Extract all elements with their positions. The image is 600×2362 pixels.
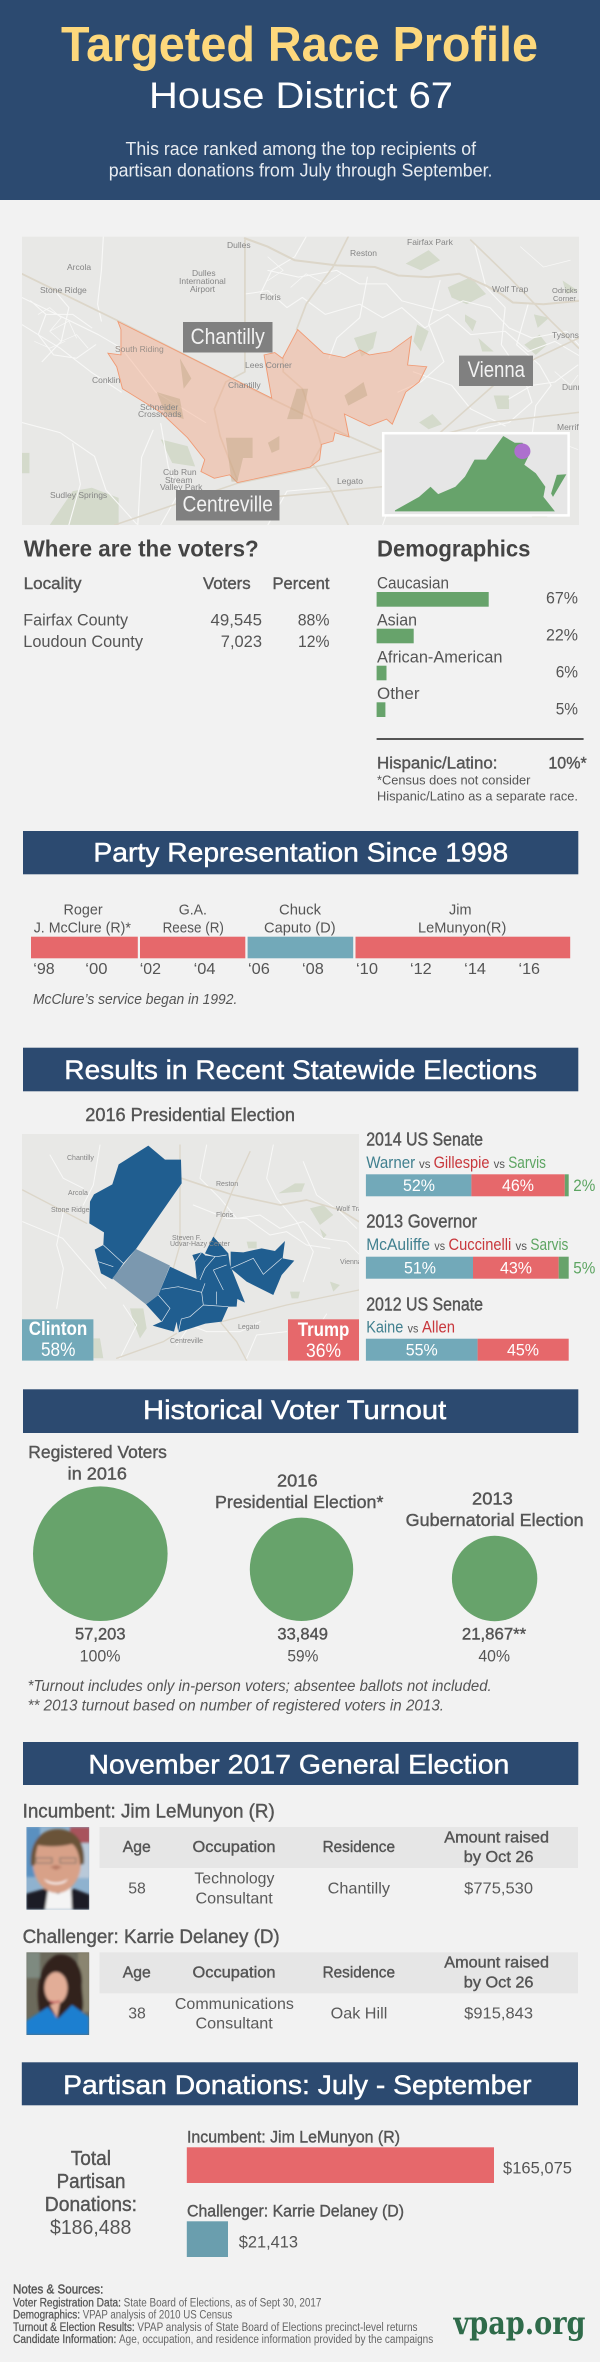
turnout footnotes: ** 2013 turnout based on number of registered voters in 2013. [28, 1698, 444, 1715]
heading bar: party representation [23, 831, 578, 874]
panel: partisan donations [22, 2062, 578, 2257]
heading bar: statewide elections: Results in Recent Statewide Elections [64, 1055, 537, 1085]
heading bar: statewide elections [23, 1048, 578, 1091]
locality table: Locality [24, 574, 82, 593]
result: 2014 US Senate: 52% [403, 1176, 435, 1195]
incumbent table: Occupation [192, 1839, 276, 1856]
callout: Clinton 58%: 58% [41, 1340, 75, 1361]
hispanic/latino stat: Hispanic/Latino: [377, 754, 498, 773]
challenger table: Consultant [196, 2016, 273, 2033]
demographic bar chart: 5% [556, 699, 578, 718]
result: 2012 US Senate [366, 1294, 569, 1361]
map place names: Legato [337, 476, 363, 486]
timeline year labels: ‘12 [410, 961, 432, 978]
total donations [45, 2148, 137, 2239]
result: 2013 Governor: vs [434, 1239, 445, 1253]
hispanic/latino stat: 10%* [548, 754, 587, 773]
notes and sources: VPAP analysis of State Board of Elections precinct-level returns [137, 2322, 418, 2334]
representative names: Reese (R) [163, 920, 224, 937]
locality table: 88% [298, 610, 330, 629]
heading bar: partisan donations [22, 2062, 578, 2105]
turnout footnotes [28, 1678, 492, 1715]
representative names: Caputo (D) [264, 920, 336, 937]
map place names: Airport [190, 284, 216, 294]
result: 2012 US Senate: 55% [406, 1341, 438, 1360]
map place names: Corner [553, 294, 576, 303]
result: 2012 US Senate: Kaine [366, 1317, 403, 1336]
result: 2014 US Senate: vs [419, 1157, 430, 1171]
circle: 2013 gubernatorial turnout: Gubernatorial Election [406, 1510, 584, 1530]
representative names: Jim [449, 902, 472, 919]
result: 2012 US Senate: 45% [507, 1341, 539, 1360]
incumbent table: Chantilly [328, 1880, 390, 1897]
notes and sources: VPAP analysis of 2010 US Census [83, 2310, 233, 2322]
result: 2012 US Senate: vs [408, 1321, 418, 1335]
donation bar: challenger [187, 2202, 404, 2257]
label: Chantilly: Chantilly [191, 324, 265, 349]
map place names: Legato [238, 1324, 260, 1331]
notes and sources [13, 2282, 433, 2346]
intro text: This race ranked among the top recipients of [126, 138, 477, 159]
notes and sources: State Board of Elections, as of Sept 30, 2017 [124, 2297, 321, 2309]
timeline year labels: ‘10 [356, 961, 378, 978]
result: 2013 Governor: 5% [573, 1258, 595, 1277]
circle: registered voters: in 2016 [68, 1464, 127, 1484]
circle: 2013 gubernatorial turnout: 40% [478, 1646, 510, 1665]
hispanic/latino stat: *Census does not consider [377, 772, 531, 787]
map place names: Dulles [192, 268, 216, 278]
map place names: Floris [260, 292, 281, 302]
map place names [51, 1155, 366, 1345]
map place names: Vienna [340, 1259, 362, 1266]
header banner [0, 0, 600, 200]
panel: general election [23, 1742, 578, 2035]
panel: statewide election results [22, 1048, 595, 1362]
result: 2013 Governor: vs [516, 1239, 527, 1253]
result: 2013 Governor: 43% [500, 1258, 532, 1277]
timeline bars [31, 937, 570, 958]
result: 2014 US Senate: Warner [366, 1153, 415, 1172]
turnout footnotes: *Turnout includes only in-person voters; absentee ballots not included. [28, 1678, 492, 1695]
map place names: Centreville [170, 1338, 203, 1345]
timeline year labels: ‘08 [302, 961, 324, 978]
callout: Clinton 58%: Clinton [29, 1319, 87, 1340]
map place names: Reston [350, 248, 377, 258]
result: 2013 Governor: Sarvis [530, 1235, 568, 1254]
heading bar: general election: November 2017 General Election [88, 1750, 509, 1780]
map place names: Floris [216, 1212, 234, 1219]
precinct shapes [89, 1146, 294, 1332]
circle: 2016 presidential turnout: 2016 [277, 1470, 318, 1490]
result: 2014 US Senate [366, 1129, 595, 1196]
heading bar: party representation: Party Representation Since 1998 [93, 838, 508, 868]
map place names: Lees Corner [245, 360, 292, 370]
map place names: Sudley Springs [50, 490, 107, 500]
result: 2014 US Senate: Sarvis [508, 1153, 546, 1172]
incumbent table: Age [123, 1839, 151, 1856]
result: 2013 Governor: Cuccinelli [448, 1235, 511, 1254]
heading bar: voter turnout [23, 1389, 578, 1433]
timeline year labels: ‘04 [194, 961, 216, 978]
donation bar: incumbent: $165,075 [503, 2158, 572, 2177]
map place names: Cub Run [163, 467, 197, 477]
timeline year labels: ‘06 [248, 961, 270, 978]
circle: registered voters: 100% [80, 1646, 120, 1665]
map place names: Crossroads [138, 409, 181, 419]
locality table: Loudoun County [23, 632, 143, 651]
notes and sources: Demographics: [13, 2310, 80, 2322]
heading: demographics: Demographics [377, 536, 530, 562]
hispanic/latino stat: Hispanic/Latino as a separate race. [377, 788, 578, 803]
locality table: 49,545 [210, 610, 262, 629]
map place names: Stream [165, 475, 192, 485]
map place names: Wolf Trap [492, 284, 528, 294]
representative names [34, 902, 506, 937]
district 67 shape [108, 321, 427, 483]
callout: Trump 36%: Trump [298, 1320, 349, 1341]
notes and sources: Notes & Sources: [13, 2282, 103, 2297]
circle: 2016 presidential turnout: Presidential Election* [215, 1492, 384, 1512]
challenger table: Amount raised [444, 1955, 549, 1972]
challenger table: 38 [128, 2006, 146, 2023]
incumbent table: Residence [323, 1839, 395, 1856]
map place names: Steven F. [172, 1235, 201, 1242]
timeline year labels: ‘02 [140, 961, 161, 978]
photo: Jim LeMunyon [26, 1827, 90, 1910]
demographic bar chart: African-American [377, 647, 502, 666]
map place names: Valley Park [160, 482, 203, 492]
heading bar: general election [23, 1742, 578, 1785]
representative names: G.A. [179, 902, 207, 919]
timeline year labels [33, 961, 540, 978]
heading bar: voter turnout: Historical Voter Turnout [143, 1395, 447, 1425]
result: 2013 Governor: 2013 Governor [366, 1212, 477, 1232]
result: 2013 Governor [366, 1212, 595, 1279]
map place names: South Riding [115, 344, 164, 354]
challenger table [100, 1952, 578, 2033]
notes and sources: Voter Registration Data: [13, 2297, 121, 2309]
demographic bar chart: Other [377, 684, 420, 703]
circle: registered voters: 57,203 [75, 1625, 126, 1644]
representative names: Roger [64, 902, 103, 919]
hispanic/latino stat [377, 754, 587, 803]
challenger table: $915,843 [464, 2006, 533, 2023]
map place names: Chantilly [67, 1155, 94, 1162]
circle: registered voters [28, 1442, 168, 1665]
heading: where are the voters: Where are the voters? [24, 536, 259, 562]
result: 2014 US Senate: 46% [502, 1176, 534, 1195]
result: 2013 Governor: McAuliffe [366, 1235, 430, 1254]
map place names: Dulles [227, 240, 251, 250]
map place names: Arcola [67, 262, 91, 272]
challenger table: Occupation [192, 1965, 276, 1982]
locality table: Percent [272, 574, 330, 593]
map place names: Fairfax Park [407, 237, 454, 247]
map place names: Wolf Trap [336, 1206, 366, 1213]
locality table: Fairfax County [23, 610, 128, 629]
total donations: Donations: [45, 2194, 137, 2216]
locality table: Voters [203, 574, 251, 593]
heading: challenger: Challenger: Karrie Delaney (D) [23, 1927, 280, 1948]
incumbent table: Technology [194, 1871, 274, 1888]
panel: party representation [23, 831, 578, 1008]
incumbent table: Amount raised [444, 1829, 549, 1846]
circle: registered voters: Registered Voters [28, 1442, 167, 1462]
notes and sources: Turnout & Election Results: [13, 2322, 135, 2334]
inset: Virginia locator map [383, 433, 569, 515]
result: 2014 US Senate: vs [494, 1157, 505, 1171]
circle: 2013 gubernatorial turnout [406, 1488, 584, 1665]
result: 2013 Governor: 51% [404, 1258, 436, 1277]
challenger table: by Oct 26 [464, 1974, 534, 1991]
result: 2014 US Senate: 2014 US Senate [366, 1129, 483, 1149]
circle: 2016 presidential turnout: 33,849 [277, 1625, 328, 1644]
heading: incumbent: Incumbent: Jim LeMunyon (R) [23, 1802, 275, 1823]
photo: Karrie Delaney [26, 1952, 90, 2035]
map place names: Chantilly [228, 380, 261, 390]
map place names: Stone Ridge [40, 285, 87, 295]
total donations: $186,488 [50, 2217, 131, 2239]
notes and sources: Candidate Information: [13, 2334, 116, 2346]
demographic bar chart: 6% [556, 662, 578, 681]
heading bar: partisan donations: Partisan Donations: July - September [63, 2070, 532, 2100]
intro text [109, 138, 492, 180]
map place names: Udvar-Hazy Center [170, 1241, 231, 1248]
timeline year labels: ‘14 [464, 961, 486, 978]
result: 2014 US Senate: Gillespie [434, 1153, 490, 1172]
map place names: Odricks [552, 286, 578, 295]
total donations: Partisan [57, 2171, 126, 2193]
map place names: Reston [216, 1181, 238, 1188]
map place names: Merrifield [557, 422, 592, 432]
callout: Trump 36%: 36% [306, 1341, 341, 1362]
timeline year labels: ‘00 [85, 961, 108, 978]
label: Vienna: Vienna [468, 357, 526, 382]
donation bar: challenger: $21,413 [239, 2232, 298, 2251]
donation bar: incumbent [187, 2128, 572, 2183]
2016 presidential map [22, 1134, 367, 1362]
map place names [40, 237, 592, 500]
map place names: Stone Ridge [51, 1207, 90, 1214]
intro text: partisan donations from July through September. [109, 160, 492, 180]
district map [22, 237, 600, 525]
notes and sources: Age, occupation, and residence information provided by the campaigns [119, 2334, 433, 2346]
result: 2012 US Senate: 2012 US Senate [366, 1294, 483, 1314]
timeline year labels: ‘16 [518, 961, 540, 978]
label: Centreville: Centreville [182, 491, 273, 516]
circle: 2013 gubernatorial turnout: 21,867** [462, 1625, 527, 1644]
demographic bar chart: 22% [546, 626, 578, 645]
locality table [23, 574, 330, 651]
heading: 2016 presidential: 2016 Presidential Election [85, 1105, 295, 1125]
challenger table: Age [123, 1965, 151, 1982]
map place names: Dunn [562, 382, 583, 392]
representative names: LeMunyon(R) [418, 920, 506, 937]
map place names: Schneider [140, 402, 178, 412]
incumbent table [100, 1827, 578, 1907]
timeline note: McClure’s service began in 1992. [33, 991, 237, 1008]
map place names: Arcola [68, 1190, 88, 1197]
demographic bar chart: Asian [377, 610, 417, 629]
incumbent table: by Oct 26 [464, 1849, 534, 1866]
panel: historical voter turnout [23, 1389, 584, 1715]
challenger table: Communications [175, 1996, 294, 2013]
challenger table: Residence [323, 1965, 395, 1982]
incumbent table: $775,530 [464, 1880, 533, 1897]
incumbent table: 58 [128, 1880, 146, 1897]
callout: Trump 36% [288, 1319, 359, 1362]
panel: where are the voters [23, 536, 330, 651]
title: Targeted Race Profile [61, 18, 538, 72]
representative names: Chuck [279, 902, 321, 919]
map place names: Conklin [92, 375, 121, 385]
demographic bar chart: Caucasian [377, 573, 449, 592]
map place names: Tysons [552, 330, 579, 340]
demographic bar chart [377, 573, 578, 718]
donation bar: incumbent: Incumbent: Jim LeMunyon (R) [187, 2128, 400, 2147]
representative names: J. McClure (R)* [34, 920, 131, 937]
total donations: Total [71, 2148, 111, 2170]
panel: demographics [377, 536, 587, 803]
locality table: 12% [298, 632, 330, 651]
donation bar: challenger: Challenger: Karrie Delaney (D) [187, 2202, 404, 2221]
subtitle: House District 67 [149, 75, 453, 116]
map place names: International [179, 276, 226, 286]
circle: 2016 presidential turnout [215, 1470, 384, 1665]
incumbent table: Consultant [196, 1890, 273, 1907]
result: 2014 US Senate: 2% [573, 1176, 595, 1195]
circle: 2016 presidential turnout: 59% [287, 1646, 318, 1665]
demographic bar chart: 67% [546, 588, 578, 607]
circle: 2013 gubernatorial turnout: 2013 [472, 1488, 513, 1508]
challenger table: Oak Hill [331, 2006, 387, 2023]
callout: Clinton 58% [22, 1319, 93, 1361]
result: 2012 US Senate: Allen [422, 1317, 455, 1336]
timeline year labels: ‘98 [33, 961, 55, 978]
locality table: 7,023 [221, 632, 262, 651]
